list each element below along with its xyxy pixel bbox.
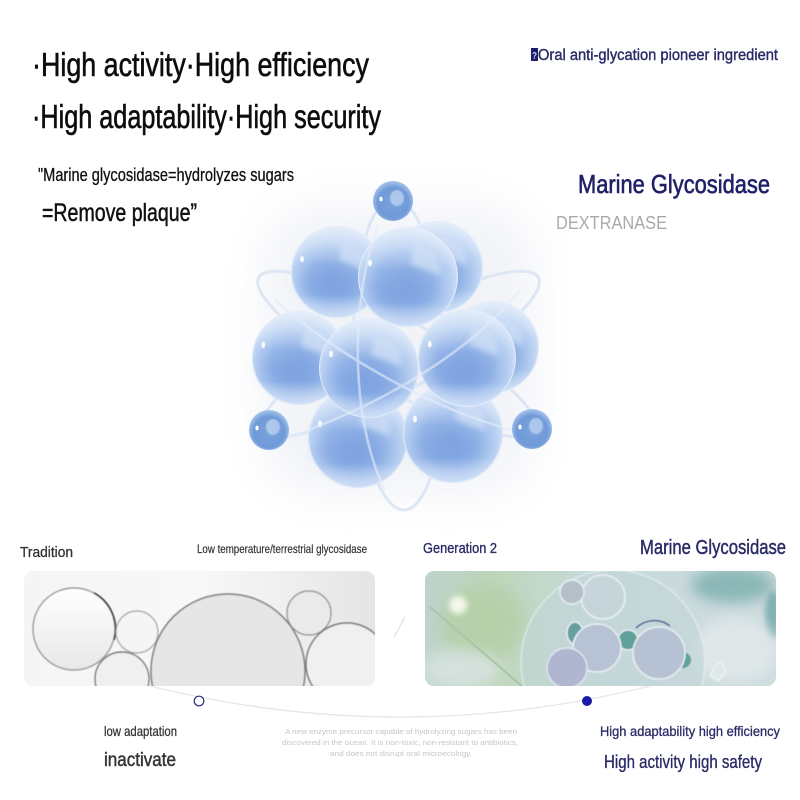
front spheres [319,227,516,418]
back spheres [252,221,539,488]
decorative slash [394,617,405,637]
connector timeline [150,686,650,717]
text block: faint description: discovered in the ocean. It is non-toxic, non-resistant to antibiotics, [282,738,518,747]
electron spheres [249,181,552,450]
title: product benefits [32,46,381,135]
heading: Marine Glycosidase: Marine Glycosidase [578,169,770,199]
marker: marine [582,696,592,706]
title: product benefits: ·High activity·High efficiency [32,46,369,83]
label: Tradition: Tradition [20,544,73,561]
text block: traditional properties: inactivate [104,750,176,771]
subheading: DEXTRANASE: DEXTRANASE [556,213,667,233]
molecule illustration [241,181,556,511]
marker: traditional [194,696,204,706]
label: low temperature glycosidase: Low temperature/terrestrial glycosidase [197,542,367,556]
text block: traditional properties: low adaptation [104,723,177,739]
text block: tagline [38,165,294,227]
back orbits [241,197,556,511]
text block: faint description: and does not disrupt oral microecology. [330,749,472,758]
text block: faint description [282,727,518,758]
panel: traditional bubbles image [24,571,375,686]
heading: pioneer ingredient: ? [532,51,537,62]
panel: marine bubbles image [425,571,776,686]
text block: tagline: "Marine glycosidase=hydrolyzes sugars [38,165,294,185]
front orbit highlights [275,225,520,490]
text block: faint description: A new enzyme precursor capable of hydrolyzing sugars has been [285,727,517,736]
title: product benefits: ·High adaptability·High security [32,98,381,135]
heading: pioneer ingredient: Oral anti-glycation pioneer ingredient [538,47,779,64]
text block: marine properties: High adaptability high efficiency [600,723,780,739]
label: Generation 2: Generation 2 [423,540,497,557]
text block: marine properties: High activity high safety [604,752,762,772]
text block: tagline: =Remove plaque” [42,199,197,227]
text block: traditional properties [104,723,177,771]
text block: marine properties [600,723,780,772]
